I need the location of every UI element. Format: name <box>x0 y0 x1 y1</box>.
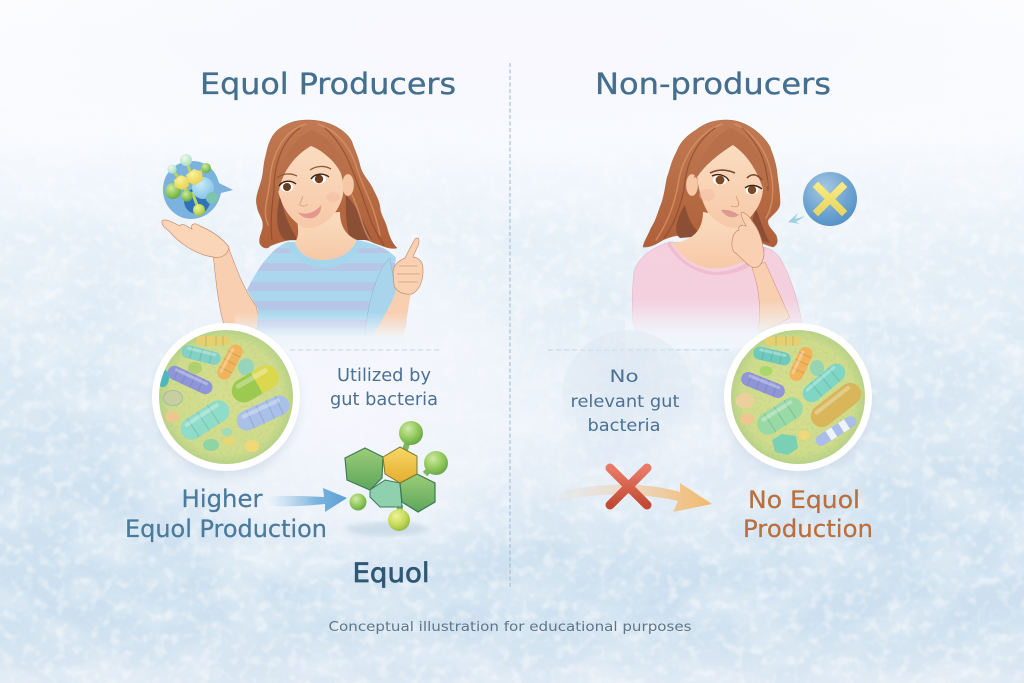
panel: no relevant gut bacteria <box>562 330 694 462</box>
forearm <box>752 262 790 333</box>
eye left <box>712 175 729 185</box>
bacteria <box>196 336 230 346</box>
pink shirt <box>632 242 802 345</box>
eyebrows <box>710 170 762 180</box>
icon: x badge <box>803 172 857 226</box>
hair strands <box>656 124 773 240</box>
bacteria <box>765 336 801 346</box>
label line: bacteria <box>588 416 660 436</box>
fade <box>625 300 815 348</box>
hair strands <box>265 124 384 245</box>
thumbs-up hand <box>393 238 423 294</box>
label: higher equol production <box>125 485 327 543</box>
label: utilized by gut bacteria: gut bacteria <box>330 390 438 410</box>
open hand <box>162 220 229 257</box>
cheeks <box>326 192 340 202</box>
small pointer arrow <box>788 213 805 224</box>
icon: molecule cluster on hand <box>163 154 233 219</box>
face <box>697 145 763 228</box>
hair <box>643 120 780 247</box>
nose and mouth <box>731 196 739 207</box>
heading: Equol Producers: Equol Producers <box>200 67 456 101</box>
petri circle: non-producers <box>724 323 872 476</box>
eye left <box>279 181 296 192</box>
label: no equol production <box>743 486 873 543</box>
vertical dashed divider <box>509 63 511 588</box>
raised forearm <box>372 290 411 338</box>
label line: relevant gut <box>570 392 680 412</box>
label: No <box>610 367 638 387</box>
icon: red x <box>610 468 647 505</box>
nose and mouth <box>300 196 308 206</box>
ear <box>342 174 354 196</box>
heading: Non-producers: Non-producers <box>595 67 831 101</box>
cheeks <box>699 189 715 201</box>
eyebrows <box>277 166 331 178</box>
left arm <box>213 246 262 330</box>
arrow: blocked <box>543 483 712 512</box>
neck <box>672 212 757 268</box>
label: utilized by gut bacteria: Utilized by <box>337 366 431 386</box>
hair <box>256 120 397 248</box>
icon: equol molecule <box>345 421 448 536</box>
hand on chin <box>732 213 764 268</box>
label: higher equol production: Higher <box>182 485 263 513</box>
label: equol: Equol <box>352 558 430 589</box>
footer note: Conceptual illustration for educational purposes <box>328 619 692 635</box>
eye right <box>745 185 762 195</box>
ear <box>686 174 698 196</box>
woman: equol producer <box>162 120 423 348</box>
dark hair under layer <box>277 195 372 240</box>
collar <box>667 242 766 275</box>
bangs <box>275 130 348 191</box>
neck <box>295 212 357 260</box>
label: no equol production: No Equol <box>748 486 860 514</box>
woman: non-producer <box>625 120 815 348</box>
label: utilized by gut bacteria <box>330 366 438 410</box>
blue backdrop <box>163 161 233 219</box>
face <box>278 145 343 228</box>
arrow: to equol molecule <box>267 488 347 512</box>
dark hair under layer <box>676 205 770 243</box>
eye right <box>311 174 329 184</box>
label: higher equol production: Equol Production <box>125 515 327 543</box>
striped shirt <box>247 240 408 336</box>
bangs <box>694 128 768 192</box>
label: no equol production: Production <box>743 515 873 543</box>
petri circle: producers <box>152 323 300 476</box>
fade <box>235 312 420 348</box>
